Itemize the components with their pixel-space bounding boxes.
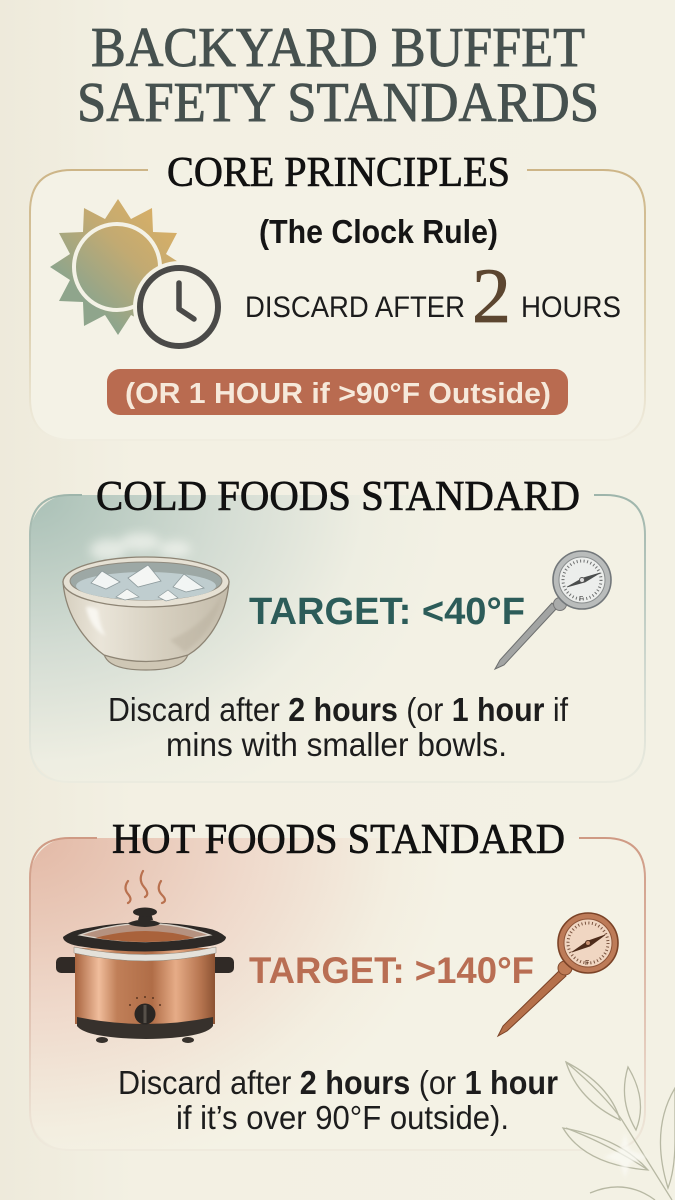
panel: hot foods — [30, 817, 645, 1150]
text: hot discard note — [118, 1064, 558, 1136]
text: discard after 2 hours: 2 — [472, 252, 511, 339]
icon: copper thermometer: F — [585, 960, 589, 967]
text: discard after 2 hours: HOURS — [521, 291, 621, 324]
subheading: the clock rule: (The Clock Rule) — [259, 213, 498, 250]
heading: cold foods: COLD FOODS STANDARD — [96, 474, 580, 520]
title: SAFETY STANDARDS — [77, 72, 599, 134]
text: discard after 2 hours: DISCARD AFTER — [245, 291, 465, 324]
title: BACKYARD BUFFET — [91, 17, 585, 79]
text: cold discard note — [108, 691, 569, 763]
text: hot discard note: Discard after 2 hours (or 1 hour — [118, 1064, 558, 1101]
heading: hot foods: HOT FOODS STANDARD — [112, 817, 565, 863]
panel: cold foods — [30, 474, 645, 782]
target: hot: TARGET: >140°F — [249, 950, 534, 991]
callout: 1 hour rule: (OR 1 HOUR if >90°F Outside) — [125, 378, 551, 410]
callout: 1 hour rule — [107, 369, 568, 415]
text: cold discard note: mins with smaller bowls. — [166, 726, 507, 763]
text: cold discard note: Discard after 2 hours (or 1 hour if — [108, 691, 569, 728]
icon: copper thermometer — [498, 913, 618, 1036]
icon: ice bowl — [63, 533, 229, 670]
decoration: leaves — [563, 1062, 675, 1200]
text: hot discard note: if it’s over 90°F outside). — [176, 1099, 509, 1136]
icon: clock — [133, 261, 225, 353]
icon: steel thermometer — [495, 551, 611, 669]
text: discard after 2 hours — [245, 252, 621, 339]
target: cold: TARGET: <40°F — [249, 591, 525, 633]
heading: core principles: CORE PRINCIPLES — [167, 150, 510, 196]
title — [77, 17, 599, 134]
icon: sun — [50, 199, 186, 335]
icon: steel thermometer: F — [579, 596, 583, 603]
icon: steam — [126, 871, 165, 903]
icon: slow cooker — [56, 908, 234, 1043]
panel: core principles — [30, 150, 645, 440]
